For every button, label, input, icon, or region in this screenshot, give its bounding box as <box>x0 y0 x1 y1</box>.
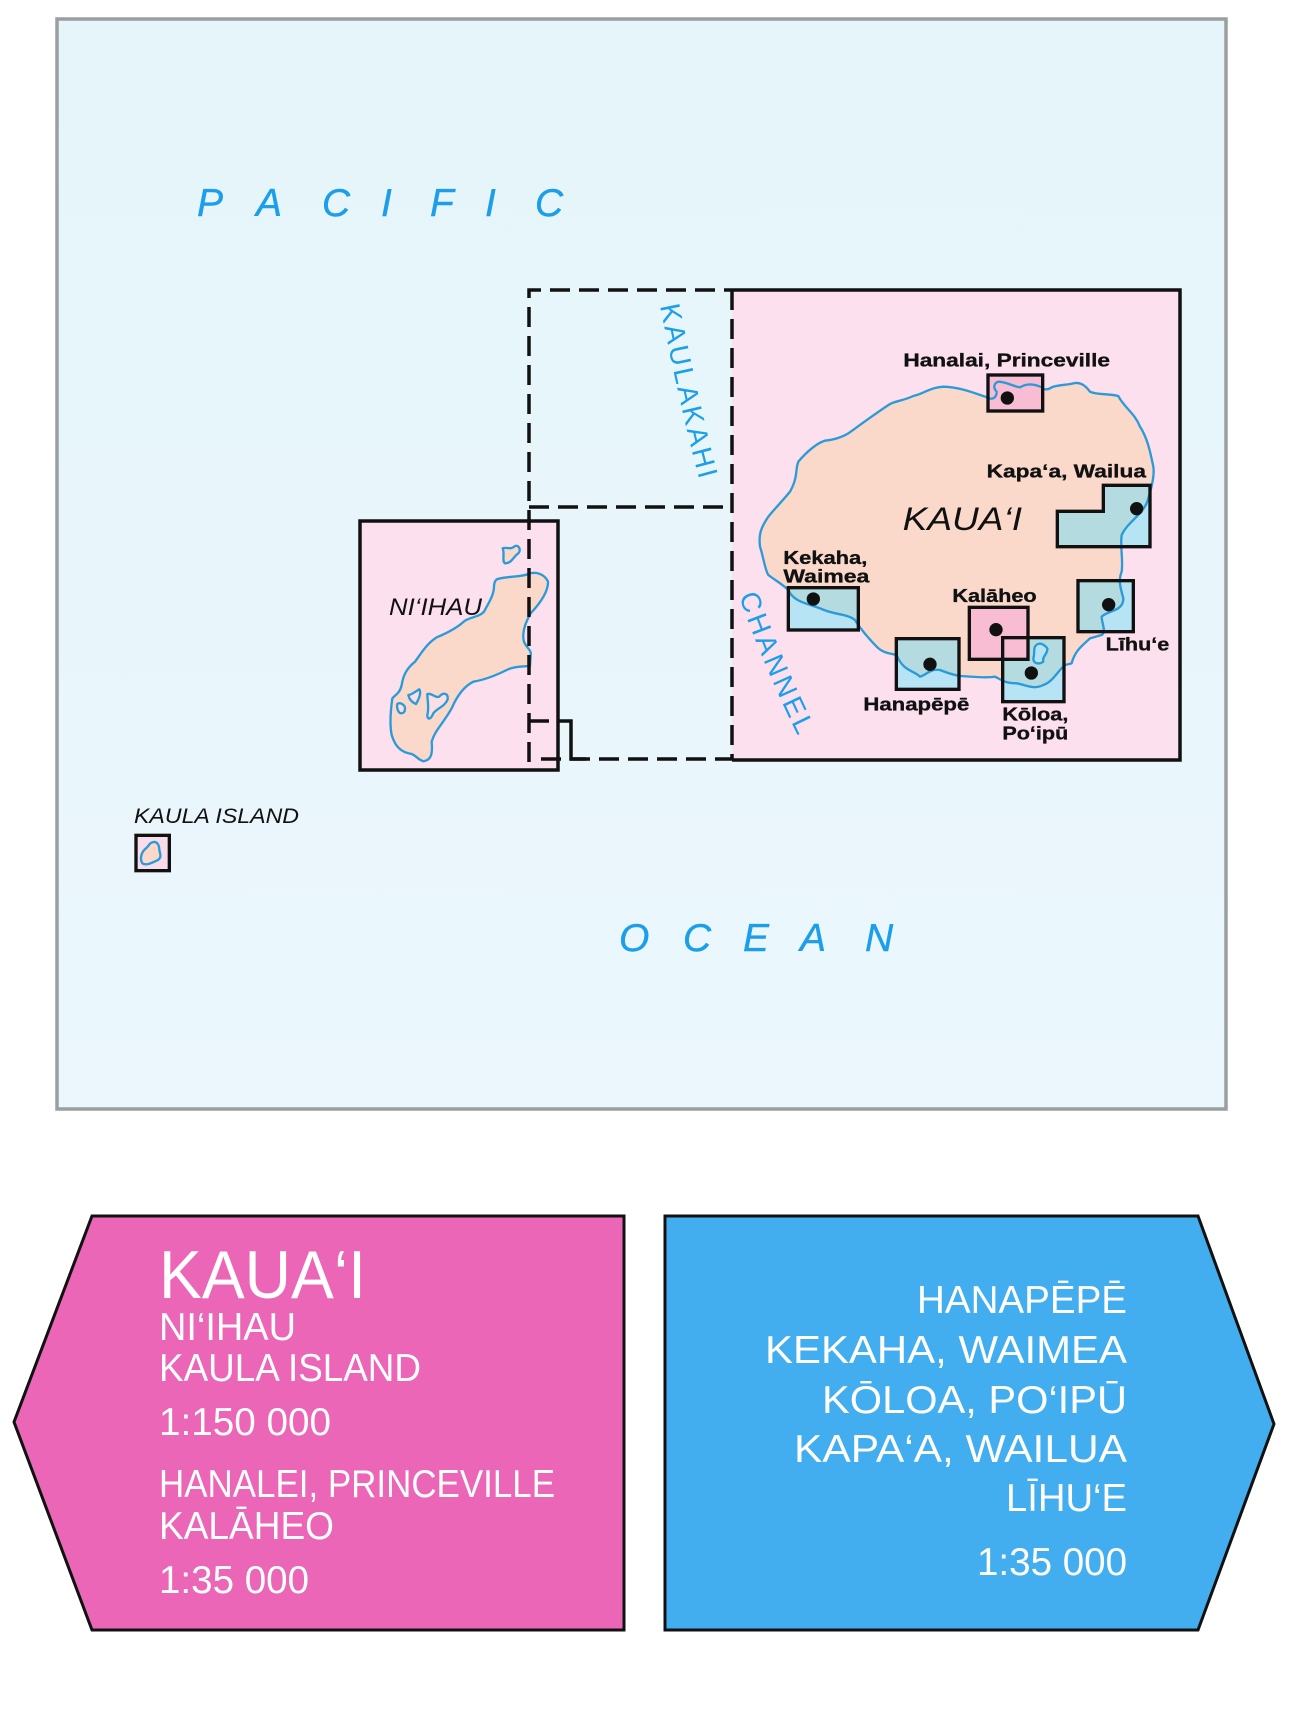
text: Kekaha, Waimea: KEKAHA, WAIMEA <box>765 1329 1127 1372</box>
sheet outlines <box>788 375 1150 702</box>
text: Hanapepe: HANAPĒPĒ <box>917 1279 1127 1322</box>
label: Kalaheo: Kalāheo <box>952 585 1037 606</box>
panel: pink index arrow <box>14 1216 624 1630</box>
text: Kaula Island: KAULA ISLAND <box>159 1347 421 1390</box>
scale: 1:35 000: 1:35 000 <box>977 1541 1127 1584</box>
ocean label: Pacific: PACIFIC <box>197 182 564 225</box>
text: Lihu'e: LĪHU‘E <box>1006 1477 1127 1520</box>
map panel: ocean frame <box>57 19 1226 1109</box>
label: Hanapepe: Hanapēpē <box>863 694 969 715</box>
label: Koloa, Po'ipu: Po‘ipū <box>1002 722 1068 743</box>
text: Hanalei, Princeville: HANALEI, PRINCEVILLE <box>159 1463 555 1506</box>
label: Kekaha, Waimea: Kekaha, <box>783 547 867 568</box>
island label: Ni'ihau: NI‘IHAU <box>389 594 483 621</box>
label: Kekaha, Waimea <box>783 547 870 586</box>
coastline: Kaua'i <box>760 382 1154 687</box>
island label: Kaula Island: KAULA ISLAND <box>134 805 299 828</box>
text: Ni'ihau: NI‘IHAU <box>159 1306 296 1349</box>
label: Koloa, Po'ipu: Kōloa, <box>1002 704 1068 725</box>
island: Kaula <box>136 835 169 871</box>
label: Kapa'a, Wailua: Kapa‘a, Wailua <box>987 460 1147 481</box>
heading: Kaua'i: KAUA‘I <box>159 1237 366 1313</box>
island: Ni'ihau <box>390 546 548 761</box>
channel label: Kaulakahi: KAULAKAHI <box>660 304 718 478</box>
index notch outline <box>558 721 586 759</box>
sheet fills: blue boxes over land <box>788 485 1150 702</box>
text: Koloa, Po'ipu: KŌLOA, PO‘IPŪ <box>822 1379 1127 1422</box>
panel: Ni'ihau map sheet <box>360 521 558 770</box>
text: Kalaheo: KALĀHEO <box>159 1505 334 1548</box>
panel: blue index arrow <box>665 1216 1274 1630</box>
sheet outline: Kaua'i top, right, bottom <box>732 290 1180 760</box>
town markers <box>807 391 1143 680</box>
island and sheet detail: Kaua'i <box>760 350 1169 743</box>
sheet fills: pink boxes <box>969 375 1043 659</box>
scale: 1:150 000: 1:150 000 <box>159 1401 331 1444</box>
island label: Kaua'i: KAUA‘I <box>903 501 1022 537</box>
label: Hanalai, Princeville: Hanalai, Princeville <box>903 350 1110 371</box>
scale: 1:35 000: 1:35 000 <box>159 1559 309 1602</box>
label: Kekaha, Waimea: Waimea <box>783 565 870 586</box>
panel: Kaua'i map sheet <box>732 290 1180 760</box>
channel label: Channel: CHANNEL <box>742 593 810 735</box>
ocean label: Ocean: OCEAN <box>619 917 894 960</box>
dashed index outlines <box>529 290 732 762</box>
label: Koloa, Po'ipu <box>1002 704 1068 743</box>
sheet fills: blue boxes over sea <box>788 485 1150 702</box>
text: Kapa'a, Wailua: KAPA‘A, WAILUA <box>794 1428 1127 1471</box>
reservoir near Koloa <box>1033 644 1047 663</box>
island: Kaua'i <box>760 382 1154 687</box>
label: Lihu'e: Līhu‘e <box>1106 634 1169 655</box>
